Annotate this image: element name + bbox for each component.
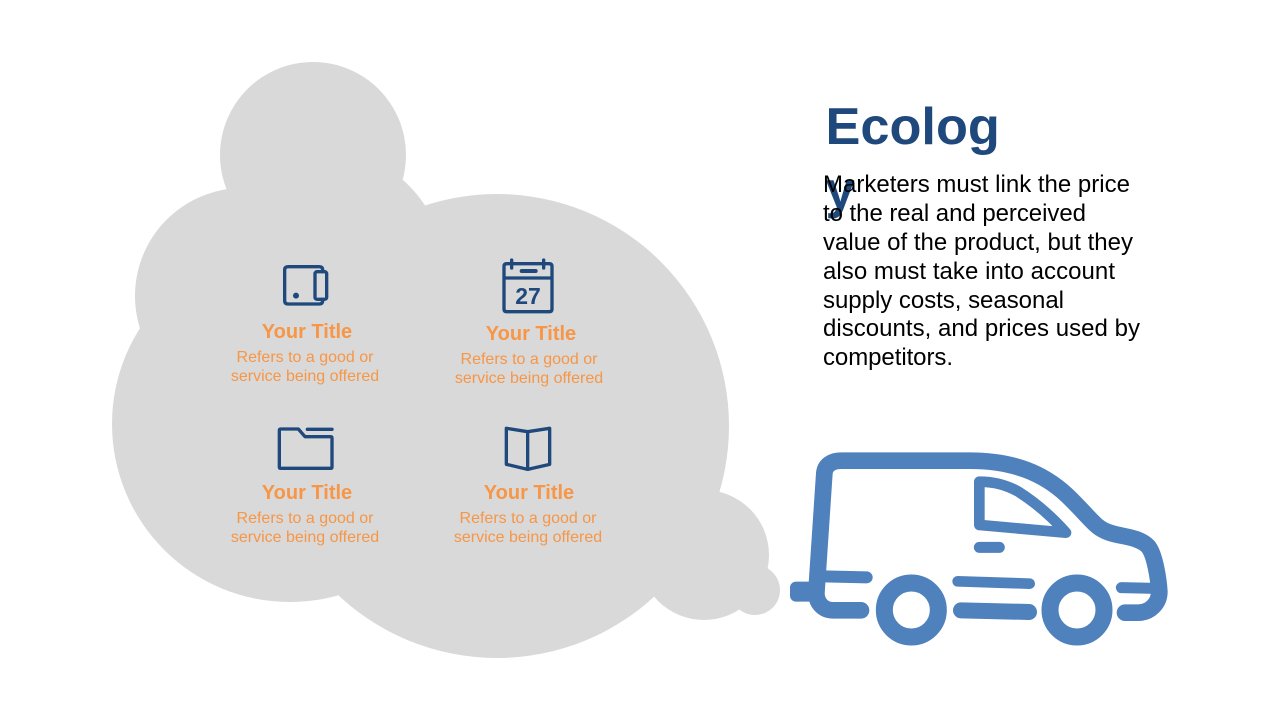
side trim lower — [961, 610, 1029, 612]
icon: calendar: 27 — [515, 283, 541, 309]
body text: value of the product, but they — [823, 229, 1133, 256]
icon: folder — [279, 429, 332, 468]
item description: book: service being offered — [454, 529, 602, 546]
body text: competitors. — [823, 344, 953, 371]
front wheel — [1050, 583, 1104, 637]
item description: folder: Refers to a good or — [237, 510, 374, 527]
side trim upper — [958, 581, 1030, 584]
item description: folder: service being offered — [231, 529, 379, 546]
item: tablet — [231, 267, 379, 385]
rear bumper — [790, 582, 815, 602]
item title: folder: Your Title — [262, 482, 352, 504]
item: folder — [231, 429, 379, 546]
item title: book: Your Title — [484, 482, 574, 504]
icon: book — [506, 428, 550, 469]
rear trim line — [823, 576, 867, 577]
item title: calendar: Your Title — [486, 323, 576, 345]
item description: tablet: service being offered — [231, 368, 379, 385]
item description: tablet: Refers to a good or — [237, 349, 374, 366]
van body outline — [816, 461, 1159, 613]
door handle — [979, 531, 999, 564]
item description: calendar: Refers to a good or — [461, 351, 598, 368]
heading: y — [826, 162, 855, 220]
item description: book: Refers to a good or — [460, 510, 597, 527]
body text: also must take into account — [823, 258, 1115, 285]
rear wheel — [884, 583, 938, 637]
window — [979, 482, 1066, 533]
icon: calendar — [504, 260, 552, 312]
heading: Ecolog — [826, 98, 1000, 156]
front trim line — [1121, 571, 1155, 605]
item description: calendar: service being offered — [455, 370, 603, 387]
body text: supply costs, seasonal — [823, 287, 1064, 314]
body text: Marketers must link the price — [823, 171, 1130, 198]
smoke cloud background — [112, 62, 780, 658]
item: calendar — [455, 260, 603, 387]
item: book — [454, 428, 602, 546]
item title: tablet: Your Title — [262, 321, 352, 343]
icon: tablet — [285, 267, 327, 304]
icon: delivery van — [790, 461, 1159, 637]
body text: to the real and perceived — [823, 200, 1086, 227]
body text: discounts, and prices used by — [823, 315, 1140, 342]
